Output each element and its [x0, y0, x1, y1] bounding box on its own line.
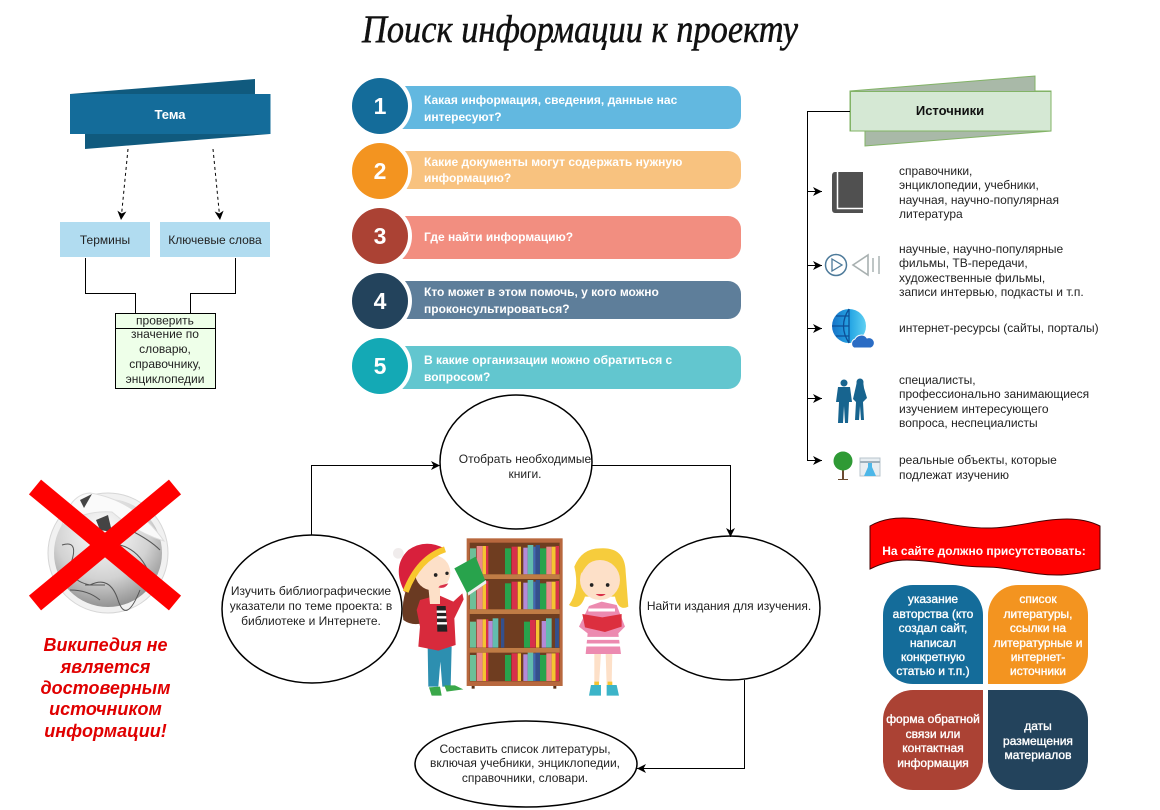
panel: search cycle [222, 395, 820, 807]
title: Поиск информации к проекту [361, 8, 799, 51]
card: authorship [883, 585, 983, 684]
question 1: 1 [374, 93, 387, 119]
icon: video and audio [826, 254, 879, 276]
card: authorship: указание [908, 592, 958, 606]
step: find publications [640, 536, 820, 680]
banner: site must have [870, 518, 1100, 575]
step: compile list: включая учебники, энциклопедии, [430, 756, 620, 770]
text: internet: интернет-ресурсы (сайты, порталы) [899, 321, 1099, 335]
connector: terms to check [86, 258, 136, 313]
text: media: научные, научно-популярные [899, 242, 1064, 256]
box: terms: Термины [80, 233, 130, 247]
banner: site must have: На сайте должно присутствовать: [882, 544, 1086, 558]
question 5: 5 [374, 353, 387, 379]
card: feedback: контактная [902, 741, 964, 755]
question 2: Какие документы могут содержать нужную [424, 155, 682, 169]
card: feedback: связи или [906, 727, 960, 741]
card: publication dates: материалов [1005, 748, 1071, 762]
text: media: художественные фильмы, [899, 271, 1045, 285]
step: select books: книги. [508, 467, 542, 481]
card: publication dates: даты [1024, 719, 1052, 733]
question 1: Какая информация, сведения, данные нас [424, 93, 678, 107]
question 3: Где найти информацию? [424, 230, 573, 244]
warning text [41, 635, 170, 741]
arrow: internet [807, 328, 822, 330]
card: publication dates [988, 690, 1088, 790]
text: books: литература [899, 207, 963, 221]
icon: crossed wikipedia globe [35, 487, 175, 613]
question 2: 2 [374, 158, 386, 184]
text: objects [899, 453, 1057, 482]
step: compile list [415, 721, 637, 807]
banner: Источники [850, 76, 1051, 146]
text: objects: подлежат изучению [899, 468, 1009, 482]
step: select books: Отобрать необходимые [459, 452, 592, 466]
box: keywords [160, 222, 270, 257]
step: compile list: справочники, словари. [462, 771, 588, 785]
question 3 [348, 204, 741, 268]
card: references: список [1019, 592, 1057, 606]
text: people: вопроса, неспециалисты [899, 416, 1038, 430]
connector: keywords to check [190, 258, 236, 313]
panel: wikipedia warning [35, 487, 175, 741]
question 4: 4 [374, 288, 387, 314]
icon: globe with cloud [832, 309, 874, 348]
step: study bibliographies [222, 535, 402, 683]
card: references: источники [1010, 664, 1066, 678]
step: study bibliographies: указатели по теме проекта: в [230, 599, 392, 613]
banner: Тема [70, 79, 270, 149]
box: check meaning: проверить [136, 314, 194, 328]
box: check meaning: энциклопедии [126, 372, 204, 386]
banner: Тема: Тема [154, 107, 186, 122]
question 4: Кто может в этом помочь, у кого можно [424, 285, 659, 299]
question 1 [348, 74, 741, 138]
arrow: people [807, 398, 822, 400]
card: authorship: конкретную [901, 650, 965, 664]
question 2 [348, 139, 741, 203]
box: check meaning: словарю, [139, 342, 191, 356]
card: feedback [883, 690, 983, 790]
panel: website requirements [870, 518, 1100, 790]
question 5: В какие организации можно обратиться с [424, 353, 673, 367]
text: books: энциклопедии, учебники, [899, 178, 1039, 192]
text: objects: реальные объекты, которые [899, 453, 1057, 467]
text: books: справочники, [899, 164, 972, 178]
banner: Источники: Источники [916, 103, 984, 118]
box: check meaning: справочнику, [129, 357, 201, 371]
question 5: вопросом? [424, 370, 490, 384]
icon: book [832, 172, 863, 213]
text: media [899, 242, 1084, 299]
warning text: информации! [44, 721, 167, 741]
card: authorship: создал сайт, [899, 621, 967, 635]
box: check meaning: значение по [131, 327, 199, 341]
card: references: ссылки на [1010, 621, 1066, 635]
text: people [899, 373, 1089, 430]
box: terms [60, 222, 150, 257]
arrow: to keywords [213, 149, 220, 220]
card: authorship: авторства (кто [893, 607, 974, 621]
question 3: 3 [374, 223, 386, 249]
card: feedback: форма обратной [886, 712, 980, 726]
arrow: books [807, 190, 822, 192]
arrow: to select [312, 466, 440, 535]
warning text: является [60, 657, 151, 677]
card: feedback: информация [897, 756, 969, 770]
arrow: to terms [121, 149, 128, 220]
text: media: записи интервью, подкасты и т.п. [899, 285, 1084, 299]
text: media: фильмы, ТВ-передачи, [899, 256, 1028, 270]
text: people: изучением интересующего [899, 402, 1049, 416]
question 1: интересуют? [424, 110, 502, 124]
arrow: objects [807, 460, 822, 462]
card: authorship: написал [910, 636, 956, 650]
girl reading red book [569, 548, 628, 696]
question 4 [348, 269, 741, 333]
text: people: специалисты, [899, 373, 976, 387]
question 4: проконсультироваться? [424, 302, 570, 316]
panel: sources [807, 76, 1099, 482]
panel: topic [60, 79, 270, 388]
warning text: источником [49, 699, 162, 719]
arrow: to list [637, 680, 744, 768]
arrow: to find [592, 466, 730, 537]
card: references [988, 585, 1088, 684]
warning text: достоверным [41, 678, 170, 698]
card: publication dates: размещения [1003, 734, 1073, 748]
connector: sources trunk [808, 112, 850, 460]
card: authorship: статью и т.п.) [896, 664, 970, 678]
icon: tree and lab [834, 452, 880, 480]
card: references: литературные и [994, 636, 1082, 650]
question 2: информацию? [424, 171, 511, 185]
text: books [899, 164, 1059, 221]
step: select books [440, 395, 592, 529]
text: people: профессионально занимающиеся [899, 387, 1089, 401]
card: references: интернет- [1011, 650, 1065, 664]
card: references: литературы, [1004, 607, 1072, 621]
question 5 [348, 334, 741, 398]
box: keywords: Ключевые слова [168, 233, 262, 247]
icon: specialists [836, 378, 867, 423]
panel: questions [348, 74, 741, 398]
warning text: Википедия не [44, 635, 167, 655]
text: books: научная, научно-популярная [899, 193, 1059, 207]
step: find publications: Найти издания для изучения. [647, 599, 811, 613]
step: compile list: Составить список литературы, [439, 742, 611, 756]
arrow: media [807, 264, 822, 266]
step: study bibliographies: библиотеке и Интернете. [241, 614, 381, 628]
illustration: children and bookshelf [393, 538, 628, 696]
box: check meaning [116, 314, 216, 388]
girl with green book [393, 544, 486, 696]
bookshelf [467, 538, 563, 689]
step: study bibliographies: Изучить библиографические [231, 584, 391, 598]
